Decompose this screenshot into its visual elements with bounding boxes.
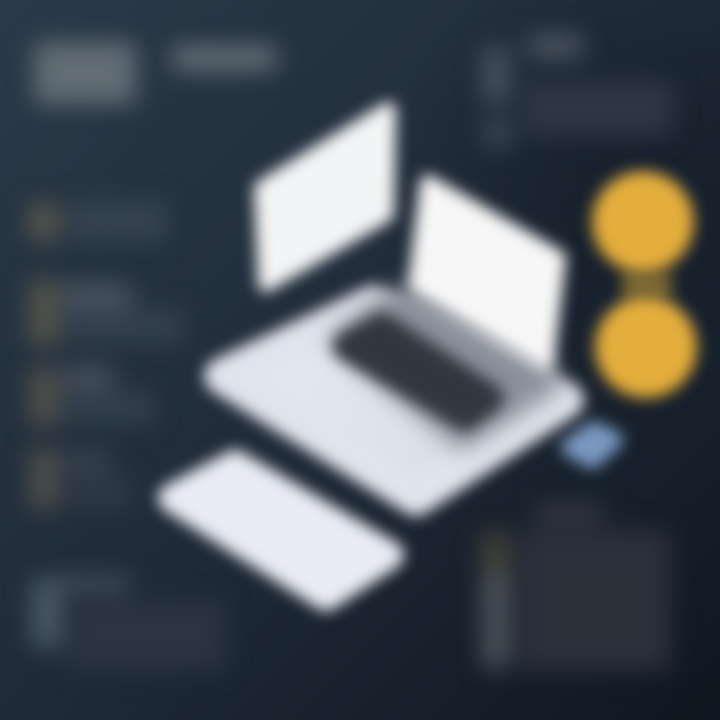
list item 5 (32, 574, 226, 670)
panel: top right text block (482, 34, 674, 148)
panel: bottom right text block (482, 504, 670, 670)
laptop screen (416, 183, 558, 362)
icon: coin link (622, 272, 672, 298)
icon: gold coin bottom (595, 296, 697, 398)
tablet (172, 464, 390, 597)
title (34, 42, 276, 104)
icon: blue connector (570, 430, 614, 460)
laptop base (222, 304, 566, 498)
list item 2 (30, 280, 184, 346)
list item 1 (30, 200, 168, 242)
list item 4 (30, 448, 134, 510)
floating screen left (262, 110, 388, 284)
icon: gold coin top (592, 171, 694, 273)
list item 3 (30, 366, 154, 426)
laptop hinge shadow (335, 292, 556, 445)
panel: left feature list (30, 200, 226, 670)
laptop keyboard (347, 327, 490, 417)
